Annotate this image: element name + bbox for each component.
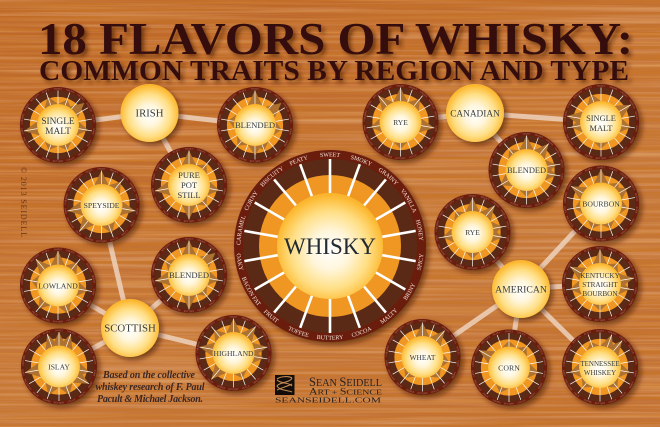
logo mark [275, 375, 294, 395]
hub: american: AMERICAN [495, 284, 547, 296]
wheel: corn [471, 329, 547, 406]
subtitle: COMMON TRAITS BY REGION AND TYPE [39, 56, 629, 87]
wheel: irish blended: BLENDED [235, 120, 275, 130]
wheel: speyside [63, 167, 140, 243]
wheel: irish single malt: MALT [45, 127, 71, 137]
hub: scottish [101, 299, 159, 357]
wheel: kentucky straight bourbon [562, 246, 638, 322]
wheel: irish single malt [20, 87, 96, 163]
wheel: canadian blended: BLENDED [507, 166, 546, 175]
wheel: pure pot still: PURE [178, 170, 200, 180]
hub: scottish: SCOTTISH [104, 322, 156, 334]
hub: irish [120, 84, 178, 142]
wheel: lowland: LOWLAND [38, 282, 78, 290]
wheel: canadian single malt: MALT [590, 124, 612, 133]
wheel: highland: HIGHLAND [213, 349, 254, 358]
wheel: canadian blended [488, 132, 565, 208]
wheel: wheat: WHEAT [410, 353, 436, 362]
wheel: american rye: RYE [465, 228, 480, 237]
hub: american [492, 260, 550, 318]
wheel: kentucky straight bourbon: BOURBON [582, 290, 618, 298]
copyright note: © 2013 SEIDELL [19, 167, 28, 237]
wheel: canadian single malt [563, 84, 639, 160]
wheel: lowland [20, 247, 96, 324]
wheel: canadian single malt: SINGLE [586, 114, 616, 123]
wheel: tennessee whiskey: TENNESSEE [580, 360, 620, 368]
central wheel: whisky [234, 150, 426, 342]
wheel: scottish blended: BLENDED [169, 270, 209, 280]
wheel: canadian rye: RYE [393, 118, 408, 127]
wheel: islay: ISLAY [48, 362, 70, 372]
wheel: kentucky straight bourbon: KENTUCKY [580, 272, 621, 280]
title: 18 FLAVORS OF WHISKY: [38, 13, 633, 64]
hub: canadian [446, 84, 504, 142]
logo text [275, 374, 383, 404]
wheel: highland [195, 315, 272, 391]
logo text: SEAN SEIDELL [309, 374, 382, 389]
hub: irish: IRISH [136, 108, 164, 120]
credit note: Pacult & Michael Jackson. [97, 394, 203, 405]
wheel: islay [21, 328, 97, 405]
wheel: wheat [384, 319, 461, 395]
credit note [96, 370, 205, 405]
wheel: pure pot still: POT [181, 180, 198, 190]
wheel: irish blended [217, 87, 293, 163]
wheel: tennessee whiskey: WHISKEY [584, 369, 616, 377]
wheel: tennessee whiskey [562, 329, 638, 405]
wheel: scottish blended [151, 237, 227, 313]
wheel: speyside: SPEYSIDE [84, 201, 120, 210]
hub: canadian: CANADIAN [450, 110, 500, 120]
credit note: Based on the collective [102, 370, 196, 381]
wheel: pure pot still: STILL [177, 190, 201, 200]
wheel: kentucky straight bourbon: STRAIGHT [582, 281, 618, 289]
wheel: irish single malt: SINGLE [41, 117, 75, 127]
wheel: bourbon [563, 165, 639, 242]
wheel: pure pot still [151, 147, 227, 223]
logo text: A RT + SCIENCE [309, 386, 383, 396]
logo text: SEANSEIDELL.COM [275, 396, 381, 404]
wheel: canadian rye [362, 84, 439, 160]
wheel: bourbon: BOURBON [582, 200, 620, 208]
wheel: american rye [434, 194, 511, 270]
connector lines [58, 113, 601, 367]
wheel: corn: CORN [498, 364, 520, 372]
credit note: whiskey research of F. Paul [96, 382, 205, 393]
central wheel: whisky: WHISKY [284, 234, 376, 259]
